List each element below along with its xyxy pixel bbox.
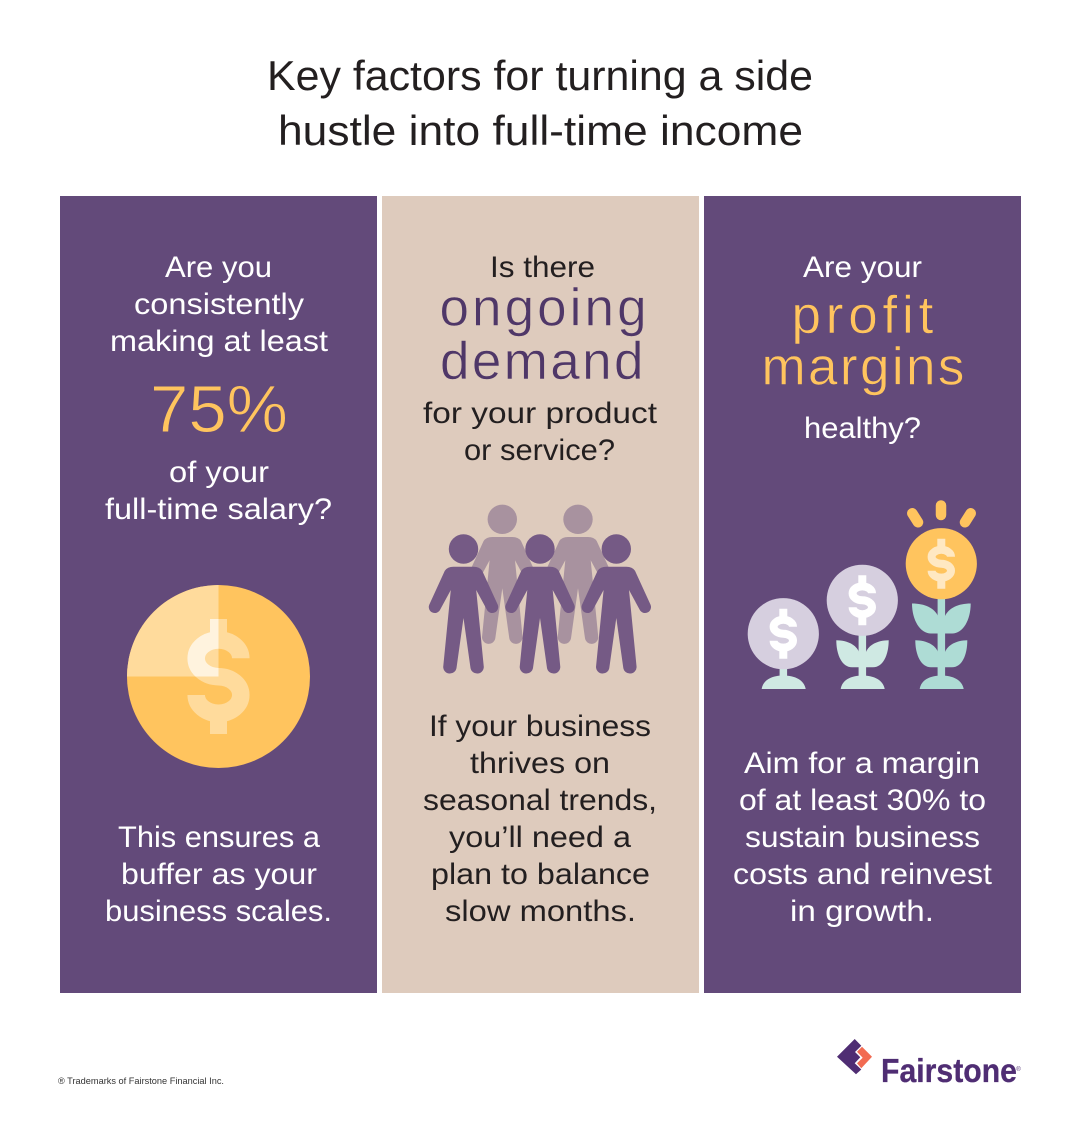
question: demand: Is there bbox=[490, 251, 595, 284]
explanation: demand: If your business bbox=[429, 710, 651, 743]
explanation: margins: in growth. bbox=[790, 895, 934, 928]
explanation: demand: you’ll need a bbox=[449, 821, 631, 854]
question: income: full-time salary? bbox=[105, 493, 332, 526]
panel: income bbox=[60, 196, 377, 993]
question: margins: Are your bbox=[803, 251, 922, 284]
logo mark bbox=[837, 1039, 872, 1074]
logo: Fairstone bbox=[837, 1039, 1021, 1090]
plant large bbox=[906, 506, 977, 689]
question: demand: for your product bbox=[423, 397, 658, 430]
footnote: ® Trademarks of Fairstone Financial Inc. bbox=[58, 1076, 224, 1087]
icon: growing money plants bbox=[748, 506, 977, 689]
question: demand: or service? bbox=[464, 434, 615, 467]
question: margins: margins bbox=[762, 338, 967, 396]
question: income bbox=[105, 251, 332, 526]
panel: margins bbox=[704, 196, 1021, 993]
question: margins: healthy? bbox=[804, 412, 921, 445]
title: hustle into full-time income bbox=[278, 107, 803, 154]
front row figures bbox=[429, 534, 651, 674]
explanation: demand: slow months. bbox=[445, 895, 636, 928]
logo registered mark: ® bbox=[1016, 1066, 1021, 1073]
panel: demand bbox=[382, 196, 699, 993]
plant medium bbox=[827, 565, 898, 689]
explanation: demand: plan to balance bbox=[431, 858, 650, 891]
question: demand: demand bbox=[440, 332, 646, 391]
question: income: making at least bbox=[110, 325, 329, 358]
icon: group of people bbox=[429, 505, 651, 674]
question: margins: profit bbox=[792, 286, 938, 345]
question: margins bbox=[762, 251, 967, 445]
logo wordmark: Fairstone bbox=[881, 1053, 1017, 1090]
explanation: demand: thrives on bbox=[470, 747, 610, 780]
explanation: margins: Aim for a margin bbox=[744, 747, 980, 780]
icon: coin pie with dollar bbox=[127, 585, 310, 768]
explanation: margins: of at least 30% to bbox=[739, 784, 986, 817]
explanation: income bbox=[105, 821, 332, 928]
question: income: consistently bbox=[134, 288, 304, 321]
sparkle rays bbox=[912, 506, 971, 522]
question: income: 75% bbox=[150, 372, 288, 447]
title: Key factors for turning a side bbox=[267, 52, 813, 99]
explanation: demand: seasonal trends, bbox=[423, 784, 657, 817]
explanation: income: buffer as your bbox=[121, 858, 317, 891]
explanation: demand bbox=[423, 710, 657, 928]
question: demand: ongoing bbox=[440, 278, 650, 338]
question: income: of your bbox=[169, 456, 269, 489]
explanation: income: business scales. bbox=[105, 895, 332, 928]
explanation: margins: sustain business bbox=[745, 821, 980, 854]
title bbox=[267, 52, 813, 154]
question: demand bbox=[423, 251, 658, 467]
explanation: margins: costs and reinvest bbox=[733, 858, 993, 891]
question: income: Are you bbox=[165, 251, 272, 284]
explanation: margins bbox=[733, 747, 993, 928]
plant small bbox=[748, 598, 819, 689]
back row figures bbox=[468, 505, 613, 644]
explanation: income: This ensures a bbox=[118, 821, 320, 854]
